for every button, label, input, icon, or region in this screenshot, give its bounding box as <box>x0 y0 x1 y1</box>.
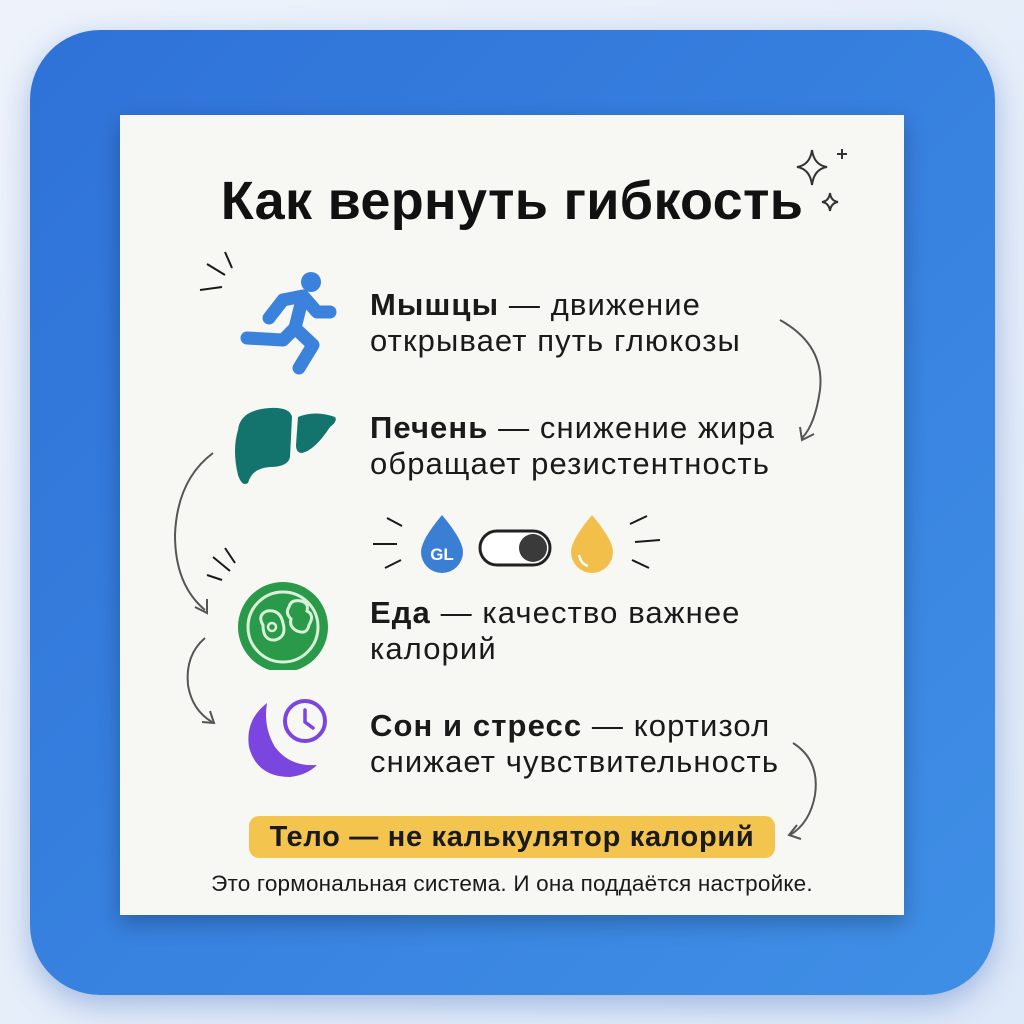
text: sleep: снижает чувствительность <box>370 744 779 779</box>
text: liver: Печень — снижение жира <box>370 410 775 445</box>
icon: sparkles <box>796 149 847 212</box>
title: Как вернуть гибкость <box>221 171 803 231</box>
icon: food plate <box>206 548 328 670</box>
text: food <box>370 595 740 666</box>
icons: GL drop, toggle, fat drop: GL <box>430 545 454 564</box>
arrow: sleep to conclusion <box>787 742 817 840</box>
text: sleep: Сон и стресс — кортизол <box>370 708 770 743</box>
text: food: Еда — качество важнее <box>370 595 740 630</box>
icon: liver <box>235 408 336 484</box>
text: muscles: Мышцы — движение <box>370 287 701 322</box>
icon: runner <box>200 252 336 374</box>
footer text: Это гормональная система. И она поддаётся настройке. <box>211 871 813 896</box>
text: muscles <box>370 287 741 358</box>
card panel <box>120 115 904 915</box>
arrow: liver to food <box>174 452 214 615</box>
callout: highlighted conclusion: Тело — не калькулятор калорий <box>270 821 754 853</box>
text: sleep <box>370 708 779 779</box>
text: muscles: открывает путь глюкозы <box>370 323 741 358</box>
icon: moon and clock <box>248 699 327 777</box>
text: liver: обращает резистентность <box>370 446 770 481</box>
arrow: food to sleep <box>186 637 216 724</box>
text: food: калорий <box>370 631 497 666</box>
text: liver <box>370 410 775 481</box>
arrow: muscles to liver <box>780 319 822 442</box>
icons: GL drop, toggle, fat drop <box>373 515 660 573</box>
